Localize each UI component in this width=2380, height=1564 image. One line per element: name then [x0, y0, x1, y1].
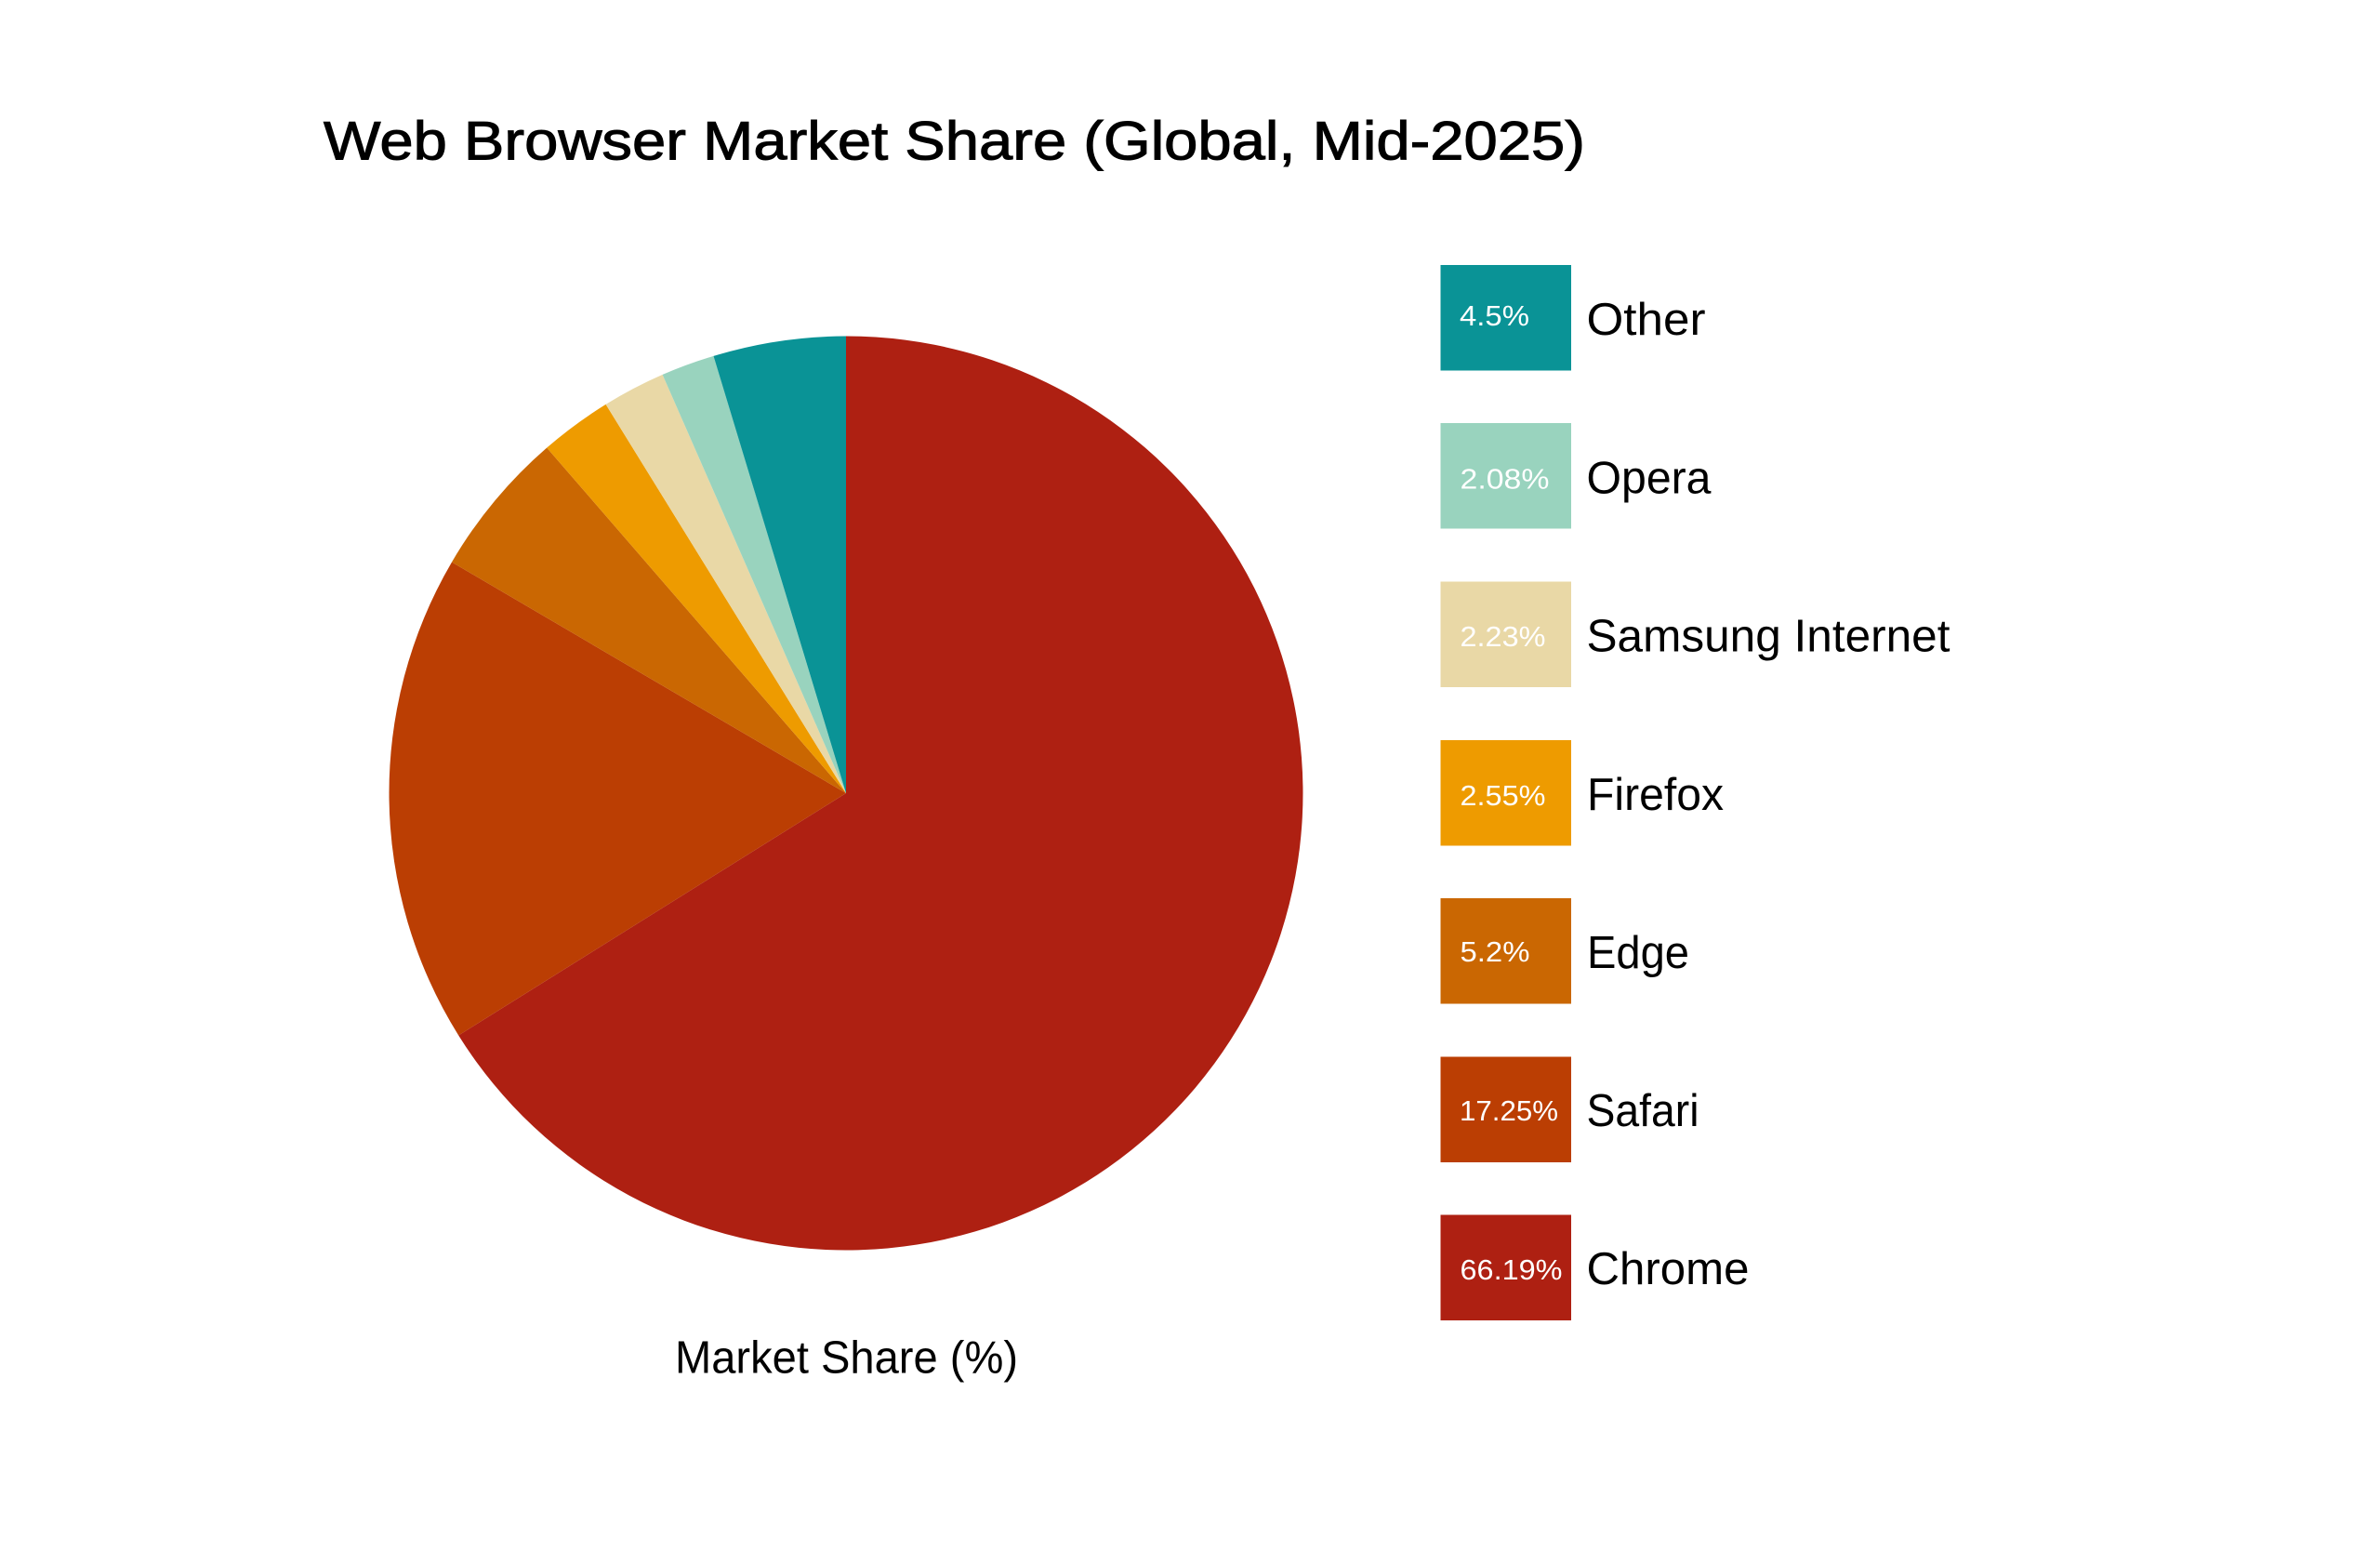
legend item: Chrome: Chrome	[1586, 1244, 1750, 1294]
legend item: Edge: 5.2%	[1460, 935, 1530, 968]
slice: Opera 2.08%	[663, 356, 846, 793]
title: Web Browser Market Share (Global, Mid-2025)	[324, 112, 1585, 171]
legend item: Samsung Internet: Samsung Internet	[1586, 612, 1950, 662]
legend item: Safari: 17.25%	[1460, 1094, 1558, 1127]
slice: Other 4.5%	[714, 337, 846, 793]
legend item: Opera: 2.08%	[1460, 463, 1549, 495]
legend item: Safari	[1441, 1056, 1699, 1162]
legend item: Opera: Opera	[1586, 454, 1712, 504]
legend item: Other: 4.5%	[1460, 299, 1529, 332]
legend item: Firefox	[1441, 740, 1724, 846]
legend item: Samsung Internet: 2.23%	[1460, 620, 1545, 653]
legend item: Edge: Edge	[1587, 928, 1689, 978]
legend item: Firefox: 2.55%	[1460, 779, 1545, 812]
legend item: Safari: Safari	[1586, 1086, 1699, 1136]
legend item: Chrome: 66.19%	[1460, 1253, 1562, 1286]
legend	[1441, 265, 1950, 1320]
pie chart	[390, 337, 1302, 1251]
legend item: Other	[1441, 265, 1705, 370]
legend item: Samsung Internet	[1441, 582, 1950, 687]
legend item: Edge	[1441, 898, 1689, 1004]
slice: Safari 17.25%	[390, 562, 846, 1036]
slice: Samsung Internet 2.23%	[606, 375, 846, 793]
slice: Firefox 2.55%	[547, 404, 846, 793]
slice: Edge 5.2%	[452, 448, 846, 793]
axis label: Market Share (%)	[675, 1333, 1018, 1384]
slice: Chrome 66.19%	[458, 337, 1302, 1251]
legend item: Chrome	[1441, 1214, 1750, 1320]
legend item: Other: Other	[1586, 295, 1705, 345]
legend item: Firefox: Firefox	[1587, 770, 1724, 820]
legend item: Opera	[1441, 423, 1712, 528]
